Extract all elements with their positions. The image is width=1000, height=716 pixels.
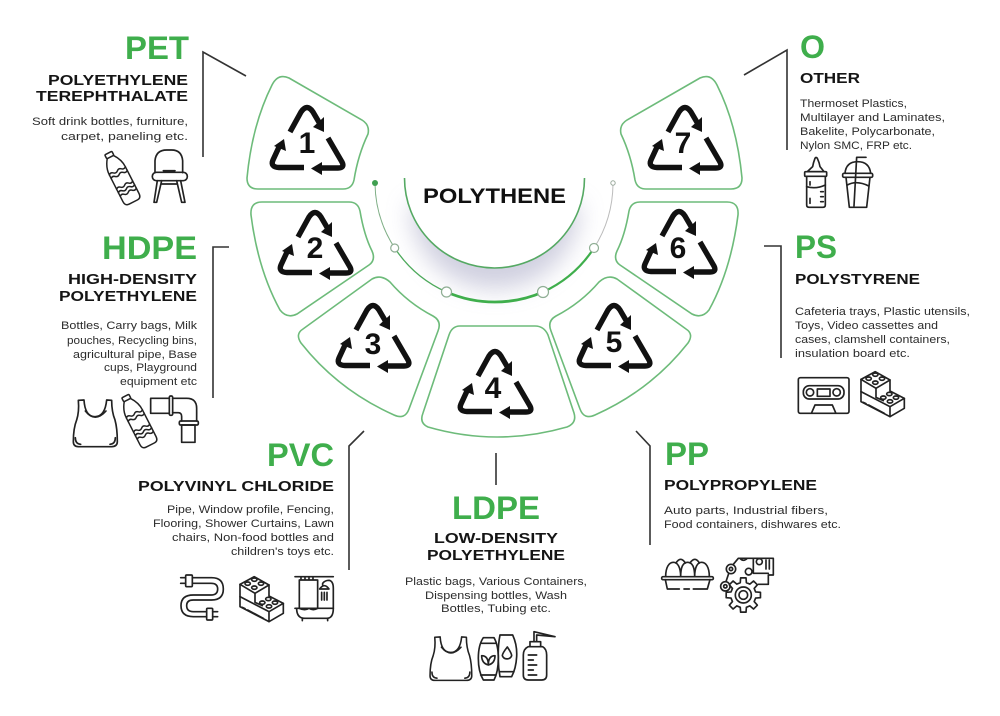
icon: chair	[152, 150, 187, 202]
HDPE subtitle	[59, 272, 197, 305]
section: PP	[636, 431, 841, 612]
PVC description: chairs, Non-food bottles and	[172, 532, 334, 544]
icon: plastic bottle	[100, 149, 141, 206]
panel: recycling code 3: 3	[365, 328, 381, 361]
icon: pipe with connectors	[181, 575, 223, 620]
O heading: O	[800, 29, 825, 65]
PVC description: children's toys etc.	[231, 546, 334, 558]
PS leader line	[764, 246, 781, 358]
LDPE subtitle: POLYETHYLENE	[427, 548, 565, 564]
PET subtitle	[36, 73, 188, 105]
O description: Nylon SMC, FRP etc.	[800, 140, 912, 152]
PET description	[32, 116, 188, 143]
section: PS	[764, 229, 970, 417]
section: HDPE	[59, 230, 229, 449]
PS description: Toys, Video cassettes and	[795, 320, 938, 332]
PVC description	[153, 504, 334, 558]
icon: baby bottle	[805, 157, 827, 207]
panel: recycling code 2: 2	[307, 232, 323, 265]
PP heading: PP	[665, 436, 709, 472]
hub title: POLYTHENE	[423, 185, 566, 208]
HDPE heading: HDPE	[102, 230, 197, 266]
PS description: Cafeteria trays, Plastic utensils,	[795, 306, 970, 318]
section: O	[744, 29, 945, 207]
central hub	[404, 160, 584, 289]
O subtitle: OTHER	[800, 71, 861, 87]
LDPE description: Bottles, Tubing etc.	[441, 603, 551, 615]
O description: Bakelite, Polycarbonate,	[800, 126, 935, 138]
HDPE description: cups, Playground	[104, 362, 197, 374]
section: PVC	[138, 431, 364, 622]
O description: Thermoset Plastics,	[800, 98, 907, 110]
icon: carry bag	[430, 637, 472, 680]
panel: recycling code 3	[298, 277, 439, 417]
panel: recycling code 1: 1	[299, 127, 315, 160]
PET subtitle: POLYETHYLENE	[48, 73, 188, 89]
PP subtitle: POLYPROPYLENE	[664, 478, 817, 494]
PS heading: PS	[795, 229, 837, 265]
PET subtitle: TEREPHTHALATE	[36, 89, 188, 105]
icon: building blocks	[240, 577, 283, 622]
PS description: insulation board etc.	[795, 348, 910, 360]
icon: video cassette	[798, 378, 849, 413]
PVC heading: PVC	[267, 437, 334, 473]
panel: recycling code 4: 4	[485, 372, 502, 405]
icon: machine gears	[721, 558, 773, 612]
PS description	[795, 306, 970, 360]
icon: pipe elbow	[151, 396, 198, 442]
PP description: Auto parts, Industrial fibers,	[664, 505, 828, 517]
LDPE subtitle	[427, 531, 565, 564]
icon: dispensing bottle	[523, 632, 555, 680]
panel: recycling code 6: 6	[670, 232, 686, 265]
PP description: Food containers, dishwares etc.	[664, 519, 841, 531]
icon: shampoo bottles	[478, 635, 517, 680]
panel: recycling code 5	[550, 277, 691, 417]
panel: recycling code 7: 7	[675, 127, 691, 160]
icon: shower curtain and bathtub	[295, 577, 333, 621]
LDPE heading: LDPE	[452, 490, 540, 526]
O description	[800, 98, 945, 152]
HDPE description: equipment etc	[120, 376, 197, 388]
panel: recycling code 4	[422, 326, 575, 437]
LDPE subtitle: LOW-DENSITY	[434, 531, 558, 547]
panel: recycling code 7	[621, 77, 742, 189]
icon: carry bag	[73, 400, 117, 447]
icon: plastic cup with straw	[843, 157, 873, 207]
panel: recycling code 1	[247, 77, 368, 189]
icon: building blocks	[861, 372, 904, 417]
icon: egg carton	[662, 559, 713, 589]
HDPE subtitle: POLYETHYLENE	[59, 289, 197, 305]
O leader line	[744, 50, 787, 150]
section: LDPE	[405, 453, 587, 680]
panel: recycling code 5: 5	[606, 326, 622, 359]
LDPE description	[405, 576, 587, 615]
HDPE description: Bottles, Carry bags, Milk	[61, 320, 197, 332]
panel: recycling code 2	[251, 202, 373, 316]
progress arc	[372, 180, 615, 302]
hub shadow	[410, 204, 580, 289]
PET heading: PET	[125, 30, 189, 66]
panel: recycling code 6	[616, 202, 738, 316]
PET leader line	[203, 52, 246, 157]
icon: plastic bottle	[117, 392, 158, 449]
PVC leader line	[349, 431, 364, 570]
hub semicircle	[404, 160, 584, 268]
PET description: Soft drink bottles, furniture,	[32, 116, 188, 128]
LDPE leader line	[495, 453, 497, 485]
hub outline	[404, 178, 584, 268]
O description: Multilayer and Laminates,	[800, 112, 945, 124]
HDPE leader line	[213, 247, 229, 398]
LDPE description: Dispensing bottles, Wash	[425, 590, 567, 602]
PS subtitle: POLYSTYRENE	[795, 272, 920, 288]
PP description	[664, 505, 841, 531]
HDPE description: agricultural pipe, Base	[73, 349, 197, 361]
section: PET	[32, 30, 246, 206]
PVC description: Flooring, Shower Curtains, Lawn	[153, 518, 334, 530]
HDPE subtitle: HIGH-DENSITY	[68, 272, 197, 288]
HDPE description	[61, 320, 197, 388]
PET description: carpet, paneling etc.	[61, 131, 188, 143]
PS description: cases, clamshell containers,	[795, 334, 950, 346]
PVC description: Pipe, Window profile, Fencing,	[167, 504, 334, 516]
LDPE description: Plastic bags, Various Containers,	[405, 576, 587, 588]
PVC subtitle: POLYVINYL CHLORIDE	[138, 479, 334, 495]
HDPE description: pouches, Recycling bins,	[67, 335, 197, 347]
PP leader line	[636, 431, 650, 545]
